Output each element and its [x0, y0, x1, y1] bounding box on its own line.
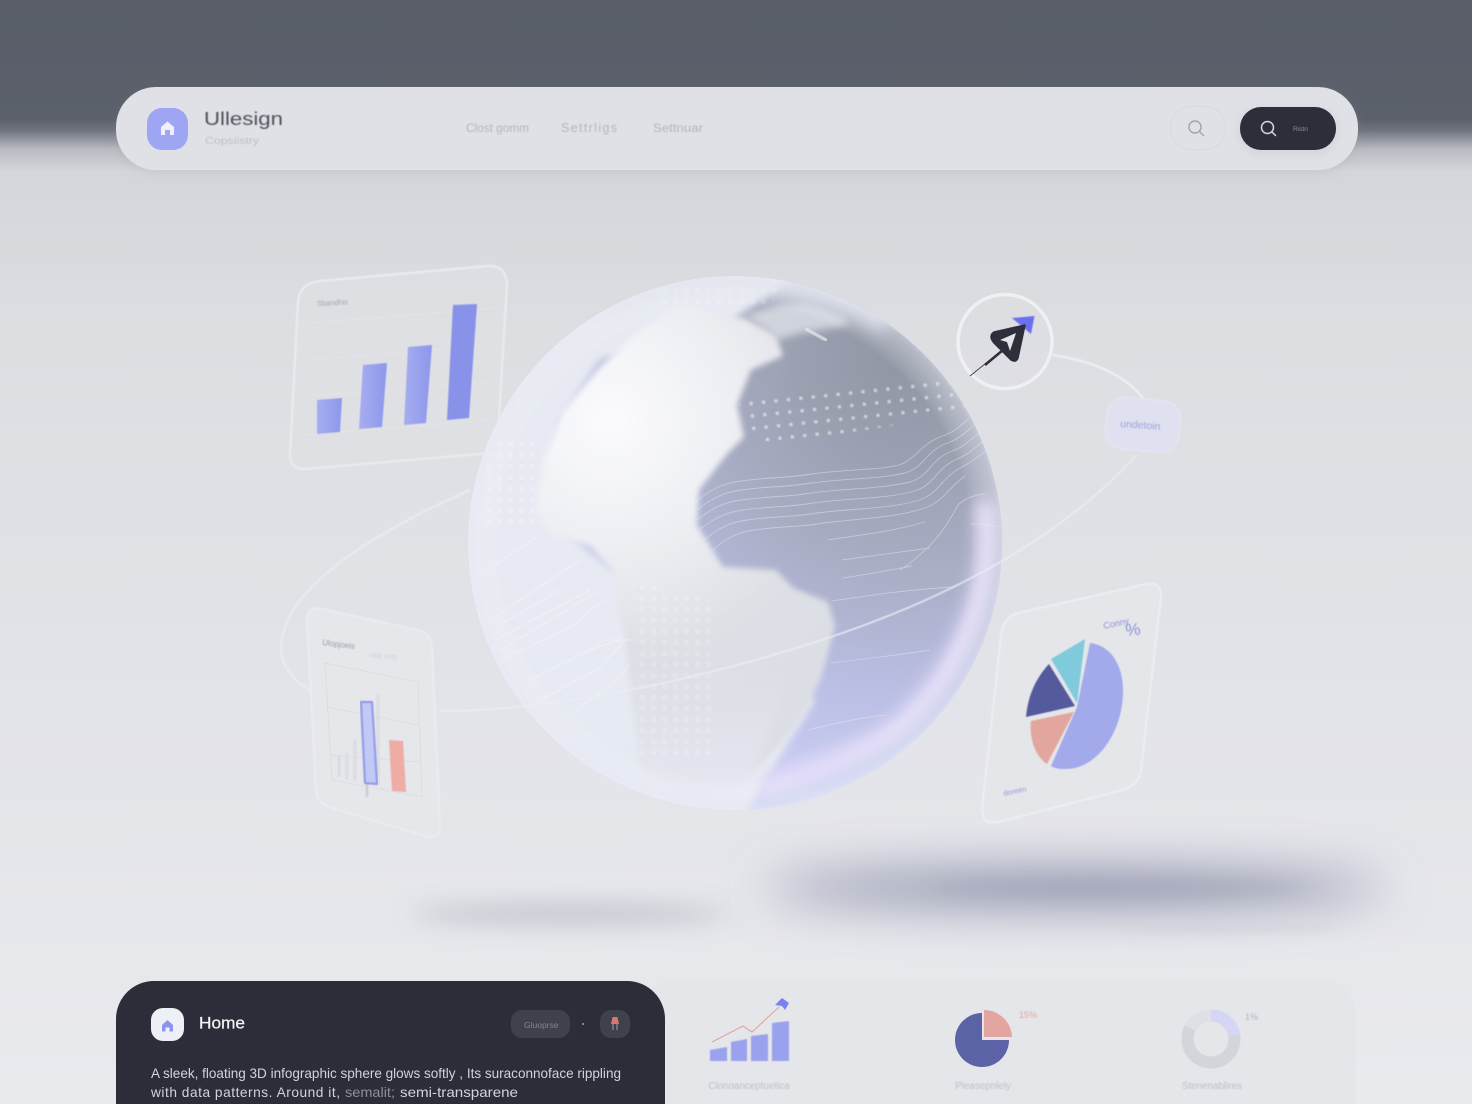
lilac rim glow — [770, 510, 987, 815]
percent label: % — [1124, 620, 1141, 640]
bottom stats panel — [640, 980, 1356, 1104]
lower fade — [646, 764, 748, 794]
pie chart — [1026, 639, 1123, 769]
mini chart: donut — [1182, 1012, 1258, 1092]
dark action pill — [1240, 107, 1336, 150]
status pill: Gluoprse — [524, 1020, 559, 1030]
label: Stenenablires — [1182, 1081, 1242, 1092]
globe — [468, 276, 1002, 810]
upper orbit arc — [1052, 355, 1143, 398]
mini chart: pie — [955, 1010, 1037, 1092]
percent label: Conny — [1102, 616, 1130, 631]
icon: home badge — [151, 1008, 184, 1041]
status pill — [511, 1010, 570, 1038]
navigation links — [466, 121, 703, 135]
alert button — [600, 1010, 630, 1038]
brand subtitle: Copsiistry — [205, 136, 259, 147]
panel label: Sbandhis — [317, 297, 349, 308]
icon: dark paper arrow — [970, 325, 1025, 376]
label: Pleasepnlely — [955, 1081, 1011, 1092]
floating bar chart panel — [290, 266, 507, 469]
card description: with data patterns. Around it, — [150, 1085, 340, 1100]
globe base — [574, 278, 1002, 810]
icon: home logo — [147, 108, 188, 150]
circuit lines — [622, 640, 630, 670]
left orbit arc — [281, 490, 470, 692]
label: Clonoanceptuetica — [708, 1081, 790, 1092]
navigation links: Settrligs — [561, 121, 617, 135]
red column — [389, 740, 406, 792]
panel label: Ulopjoeis — [322, 638, 356, 651]
pale left ocean — [468, 276, 816, 809]
header bar — [116, 87, 1358, 170]
card description — [150, 1066, 621, 1100]
search button — [1170, 106, 1226, 150]
navigation links: Settnuar — [653, 123, 703, 135]
card description: A sleek, floating 3D infographic sphere glows softly , Its suraconnoface rippling — [151, 1066, 621, 1081]
card heading: Home — [199, 1014, 245, 1032]
percent value: 1% — [1245, 1012, 1258, 1022]
ground shadows — [410, 870, 1385, 932]
mini chart: growth bars — [708, 998, 790, 1092]
chart grid — [325, 663, 422, 797]
percent label — [1102, 616, 1141, 640]
separator dot — [582, 1023, 584, 1025]
data tag pill: undetoin — [1120, 418, 1161, 433]
wave data lines — [697, 418, 1000, 730]
blue column — [361, 702, 377, 784]
icon: blue arrow tip — [1012, 316, 1034, 334]
arrow node — [958, 294, 1052, 388]
navigation links: Clost gomm — [466, 123, 529, 135]
pale top cap — [765, 281, 891, 336]
floating pie chart panel — [982, 584, 1161, 823]
foreground orbit line — [440, 455, 1137, 711]
floating column chart panel — [307, 608, 440, 837]
percent value: 15% — [1019, 1010, 1037, 1020]
card description: semalit; — [345, 1085, 395, 1100]
data dot bands — [740, 300, 1016, 594]
bars — [317, 304, 477, 434]
dark action pill: Ristn — [1293, 126, 1308, 133]
card description: semi-transparene — [400, 1085, 518, 1100]
globe rim — [748, 282, 1002, 810]
data tag pill — [1103, 395, 1183, 455]
faint columns — [339, 695, 378, 797]
continents — [534, 303, 848, 800]
grid lines — [304, 308, 495, 435]
panel tag: usa sim — [369, 650, 397, 662]
footnote label: doreen — [1003, 784, 1027, 798]
dark info card — [116, 981, 665, 1104]
brand title: Ullesign — [204, 109, 283, 129]
